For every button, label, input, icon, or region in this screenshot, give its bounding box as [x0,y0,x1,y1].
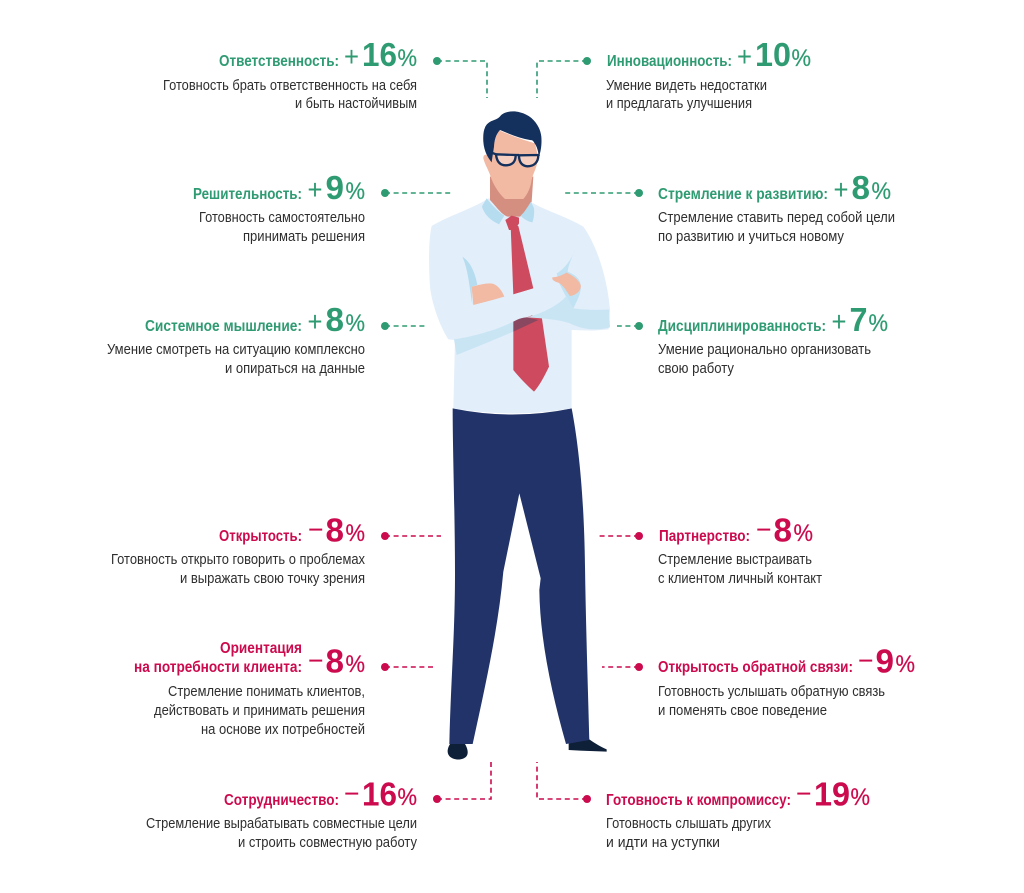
item: Готовность к компромиссу -19%: Готовность к компромиссу: [606,792,791,809]
item: Ориентация на потребности клиента -8%: − [308,645,324,676]
item: Ориентация на потребности клиента -8%: Ориентация [220,640,302,657]
item: Стремление к развитию +8%: по развитию и учиться новому [658,228,844,245]
item: Партнерство -8%: 8 [774,512,792,550]
item: Системное мышление +8%: и опираться на данные [225,360,365,377]
item: Готовность к компромиссу -19%: Готовность слышать других [606,815,771,832]
item: Решительность +9% [193,170,453,245]
item: Открытость обратной связи -9%: Открытость обратной связи: [658,659,853,676]
head with hair and glasses [482,111,542,230]
item: Инновационность +10% [537,37,811,112]
item: Инновационность +10%: Умение видеть недостатки [606,77,767,94]
item: Открытость обратной связи -9% [602,644,915,719]
item: Ответственность +16%: и быть настойчивым [295,95,417,112]
item: Партнерство -8% [598,512,822,587]
tie [511,226,533,295]
item: Партнерство -8%: с клиентом личный контакт [658,570,822,587]
item: Инновационность +10%: 10 [755,37,791,74]
item: Ориентация на потребности клиента -8%: на основе их потребностей [201,721,365,738]
item: Решительность +9%: 9 [326,170,344,207]
glasses [492,153,540,166]
item: Готовность к компромиссу -19%: % [850,784,870,811]
item: Ориентация на потребности клиента -8%: 8 [326,644,344,680]
item: Инновационность +10%: + [737,41,752,72]
item: Открытость -8%: Открытость: [219,528,302,545]
item: Готовность к компромиссу -19%: 19 [814,776,850,814]
item: Дисциплинированность +7%: 7 [850,302,868,339]
item: Стремление к развитию +8%: Стремление к развитию: [658,186,828,203]
item: Партнерство -8%: − [756,514,772,545]
item: Готовность к компромиссу -19%: и идти на уступки [606,834,720,851]
item: Дисциплинированность +7%: + [832,306,846,337]
item: Системное мышление +8%: + [308,306,322,337]
item: Сотрудничество -16%: и строить совместную работу [238,834,417,851]
item: Ответственность +16% [163,37,487,112]
item: Ответственность +16%: + [344,41,359,72]
item: Сотрудничество -16% [146,762,491,851]
crossed arms [443,248,610,355]
item: Дисциплинированность +7%: % [868,310,888,337]
item: Открытость -8%: 8 [326,512,344,550]
item: Ориентация на потребности клиента -8%: % [346,651,365,678]
item: Системное мышление +8% [107,302,427,377]
item: Дисциплинированность +7% [617,302,888,377]
item: Открытость -8% [111,512,441,587]
item: Решительность +9%: Готовность самостоятельно [199,209,365,226]
item: Открытость обратной связи -9%: Готовность услышать обратную связь [658,683,885,700]
item: Сотрудничество -16%: − [344,778,360,809]
item: Ориентация на потребности клиента -8% [134,640,436,738]
item: Стремление к развитию +8%: 8 [852,170,870,207]
item: Дисциплинированность +7%: Умение рационально организовать [658,341,871,358]
item: Ориентация на потребности клиента -8%: Стремление понимать клиентов, [168,683,365,700]
item: Сотрудничество -16%: Стремление вырабатывать совместные цели [146,815,417,832]
item: Стремление к развитию +8%: + [834,174,848,205]
item: Готовность к компромиссу -19% [537,762,870,851]
item: Партнерство -8%: % [794,520,813,547]
item: Решительность +9%: принимать решения [243,228,365,245]
item: Стремление к развитию +8%: Стремление ставить перед собой цели [658,209,895,226]
item: Партнерство -8%: Стремление выстраивать [658,551,812,568]
item: Системное мышление +8%: % [346,310,365,337]
item: Системное мышление +8%: Системное мышление: [145,318,302,335]
item: Системное мышление +8%: 8 [326,302,344,339]
item: Сотрудничество -16%: Сотрудничество: [224,792,339,809]
item: Открытость -8%: % [346,520,365,547]
item: Ориентация на потребности клиента -8%: на потребности клиента: [134,659,302,676]
item: Открытость обратной связи -9%: − [858,645,874,676]
item: Ответственность +16%: 16 [362,37,397,74]
item: Открытость -8%: − [308,514,324,545]
item: Системное мышление +8%: Умение смотреть на ситуацию комплексно [107,341,365,358]
item: Ответственность +16%: Ответственность: [219,53,339,70]
trousers and shoes [448,408,607,759]
item: Решительность +9%: + [308,174,322,205]
item: Ответственность +16%: Готовность брать ответственность на себя [163,77,417,94]
item: Сотрудничество -16%: 16 [362,776,397,814]
item: Партнерство -8%: Партнерство: [659,528,750,545]
item: Решительность +9%: Решительность: [193,186,302,203]
tie knot [505,216,519,230]
shirt body [429,198,610,413]
item: Дисциплинированность +7%: свою работу [658,360,734,377]
item: Инновационность +10%: и предлагать улучшения [606,95,752,112]
item: Сотрудничество -16%: % [398,784,417,811]
collar [482,198,504,224]
item: Инновационность +10%: Инновационность: [607,53,732,70]
item: Стремление к развитию +8% [563,170,895,245]
item: Инновационность +10%: % [792,45,811,72]
item: Ответственность +16%: % [398,45,417,72]
item: Открытость обратной связи -9%: 9 [876,644,894,680]
item: Дисциплинированность +7%: Дисциплинированность: [658,318,826,335]
figure: businessman with crossed arms [429,111,610,759]
item: Решительность +9%: % [346,178,365,205]
item: Открытость -8%: и выражать свою точку зрения [180,570,365,587]
item: Открытость обратной связи -9%: % [896,651,915,678]
item: Готовность к компромиссу -19%: − [796,778,812,809]
item: Ориентация на потребности клиента -8%: действовать и принимать решения [154,702,365,719]
item: Стремление к развитию +8%: % [872,178,891,205]
item: Открытость -8%: Готовность открыто говорить о проблемах [111,551,365,568]
item: Открытость обратной связи -9%: и поменять свое поведение [658,702,827,719]
